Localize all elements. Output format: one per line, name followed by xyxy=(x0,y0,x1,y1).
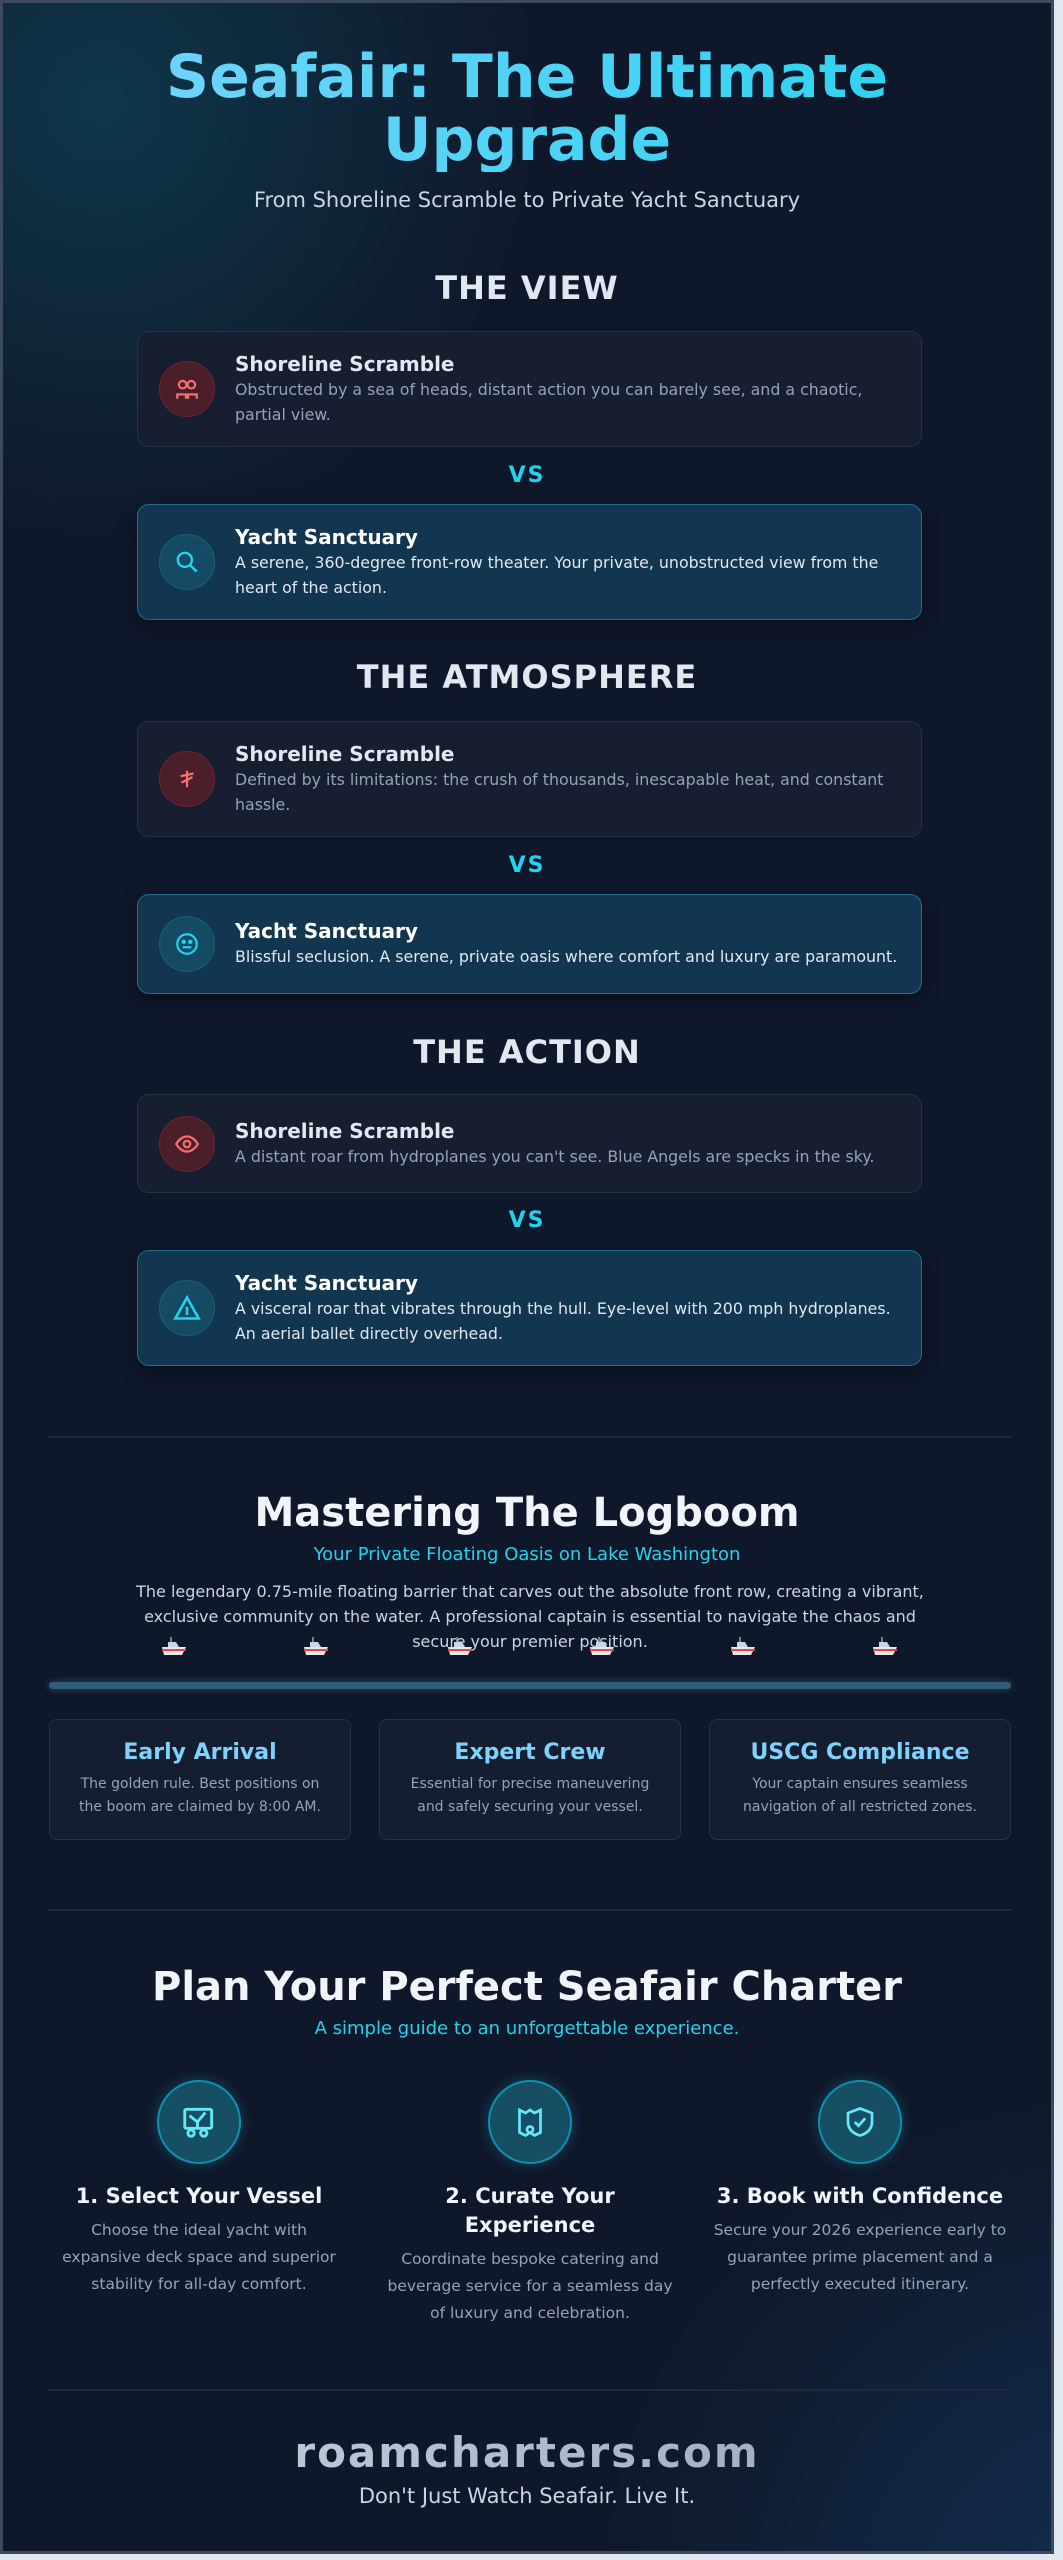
tip: uscg compliance: USCG Compliance xyxy=(750,1740,970,1765)
icon: eye xyxy=(159,1116,215,1172)
card: view yacht: Yacht Sanctuary xyxy=(235,524,418,548)
step 1: stability for all-day comfort. xyxy=(91,2275,307,2293)
icon: map xyxy=(488,2080,572,2164)
logboom description: The legendary 0.75-mile floating barrier that carves out the absolute front row, creating a vibrant, exclusive community on the water. A professional captain is essential to navigate the chaos and secure your premier position. xyxy=(136,1582,924,1651)
card: atmosphere shoreline: Shoreline Scramble xyxy=(235,742,454,766)
tip: uscg compliance xyxy=(709,1719,1011,1840)
step 2: of luxury and celebration. xyxy=(430,2304,630,2322)
tip: uscg compliance: navigation of all restricted zones. xyxy=(743,1799,977,1815)
card: view shoreline: Shoreline Scramble xyxy=(235,352,454,376)
tip: early arrival: Early Arrival xyxy=(123,1740,277,1765)
card: action shoreline: A distant roar from hydroplanes you can't see. Blue Angels are specks in the sky. xyxy=(235,1146,874,1166)
tip: expert crew: and safely securing your vessel. xyxy=(417,1799,643,1815)
step 3: perfectly executed itinerary. xyxy=(751,2275,969,2293)
footer tagline: Don't Just Watch Seafair. Live It. xyxy=(359,2484,695,2508)
icon: shield xyxy=(818,2080,902,2164)
footer brand: roamcharters.com xyxy=(294,2428,760,2477)
step 3: Secure your 2026 experience early to xyxy=(714,2221,1006,2239)
vs: VS xyxy=(509,853,545,878)
card: action shoreline: Shoreline Scramble xyxy=(235,1118,454,1142)
card: action yacht: A visceral roar that vibrates through the hull. Eye-level with 200 mph hydroplanes. An aerial ballet directly overhead. xyxy=(235,1298,891,1342)
tip: early arrival: the boom are claimed by 8:00 AM. xyxy=(79,1799,321,1815)
step 1: Choose the ideal yacht with xyxy=(91,2221,307,2239)
step 3: guarantee prime placement and a xyxy=(727,2248,993,2266)
step 2: Experience xyxy=(465,2213,595,2237)
tip: early arrival: The golden rule. Best positions on xyxy=(81,1776,319,1792)
card: view shoreline xyxy=(137,331,922,447)
step 2 xyxy=(387,2074,672,2322)
card: action yacht: Yacht Sanctuary xyxy=(235,1270,418,1294)
vs: VS xyxy=(509,1208,545,1233)
logboom bar xyxy=(49,1682,1011,1689)
heading: plan: Plan Your Perfect Seafair Charter xyxy=(152,1964,902,2010)
card: atmosphere shoreline: Defined by its limitations: the crush of thousands, inescapable heat, and constant hassle. xyxy=(235,770,884,814)
tip: early arrival xyxy=(49,1719,351,1840)
step 2: 2. Curate Your xyxy=(445,2184,615,2208)
footer brand xyxy=(3,2428,1051,2477)
tip: uscg compliance: Your captain ensures seamless xyxy=(752,1776,968,1792)
heading: mastering the logboom: Mastering The Logboom xyxy=(254,1490,800,1536)
step 1: expansive deck space and superior xyxy=(62,2248,336,2266)
card: view yacht xyxy=(137,504,922,620)
step 1 xyxy=(62,2074,336,2293)
icon: smile xyxy=(159,916,215,972)
subheading plan: A simple guide to an unforgettable experience. xyxy=(315,2018,739,2039)
step 3 xyxy=(714,2074,1006,2293)
heading: the view: THE VIEW xyxy=(435,269,619,307)
tip: expert crew: Essential for precise maneuvering xyxy=(411,1776,649,1792)
title: Seafair: The Ultimate xyxy=(166,42,888,112)
step 2: Coordinate bespoke catering and xyxy=(401,2250,659,2268)
icon: triangle xyxy=(159,1280,215,1336)
card: atmosphere yacht: Blissful seclusion. A serene, private oasis where comfort and luxury are paramount. xyxy=(235,947,897,966)
card: atmosphere shoreline xyxy=(137,721,922,837)
icon: crowd xyxy=(159,361,215,417)
title: Upgrade xyxy=(383,105,671,175)
tip: expert crew xyxy=(379,1719,681,1840)
card: action shoreline xyxy=(137,1094,922,1193)
heading: the action: THE ACTION xyxy=(413,1033,641,1071)
card: atmosphere yacht: Yacht Sanctuary xyxy=(235,919,418,943)
subheading logboom: Your Private Floating Oasis on Lake Washington xyxy=(314,1544,740,1565)
vs: VS xyxy=(509,463,545,488)
step 3: 3. Book with Confidence xyxy=(717,2184,1003,2208)
step 1: 1. Select Your Vessel xyxy=(76,2184,322,2208)
heading: the atmosphere: THE ATMOSPHERE xyxy=(357,658,697,696)
icon: search xyxy=(159,534,215,590)
step 2: beverage service for a seamless day xyxy=(387,2277,672,2295)
subtitle: From Shoreline Scramble to Private Yacht Sanctuary xyxy=(254,188,800,212)
icon: heat xyxy=(159,751,215,807)
boats row xyxy=(162,1637,897,1655)
tip: expert crew: Expert Crew xyxy=(454,1740,606,1765)
card: view yacht: A serene, 360-degree front-row theater. Your private, unobstructed view from the heart of the action. xyxy=(235,552,878,596)
card: action yacht xyxy=(137,1250,922,1366)
card: atmosphere yacht xyxy=(137,894,922,994)
icon: vessel xyxy=(157,2080,241,2164)
title xyxy=(3,46,1051,172)
card: view shoreline: Obstructed by a sea of heads, distant action you can barely see, and a chaotic, partial view. xyxy=(235,380,862,424)
